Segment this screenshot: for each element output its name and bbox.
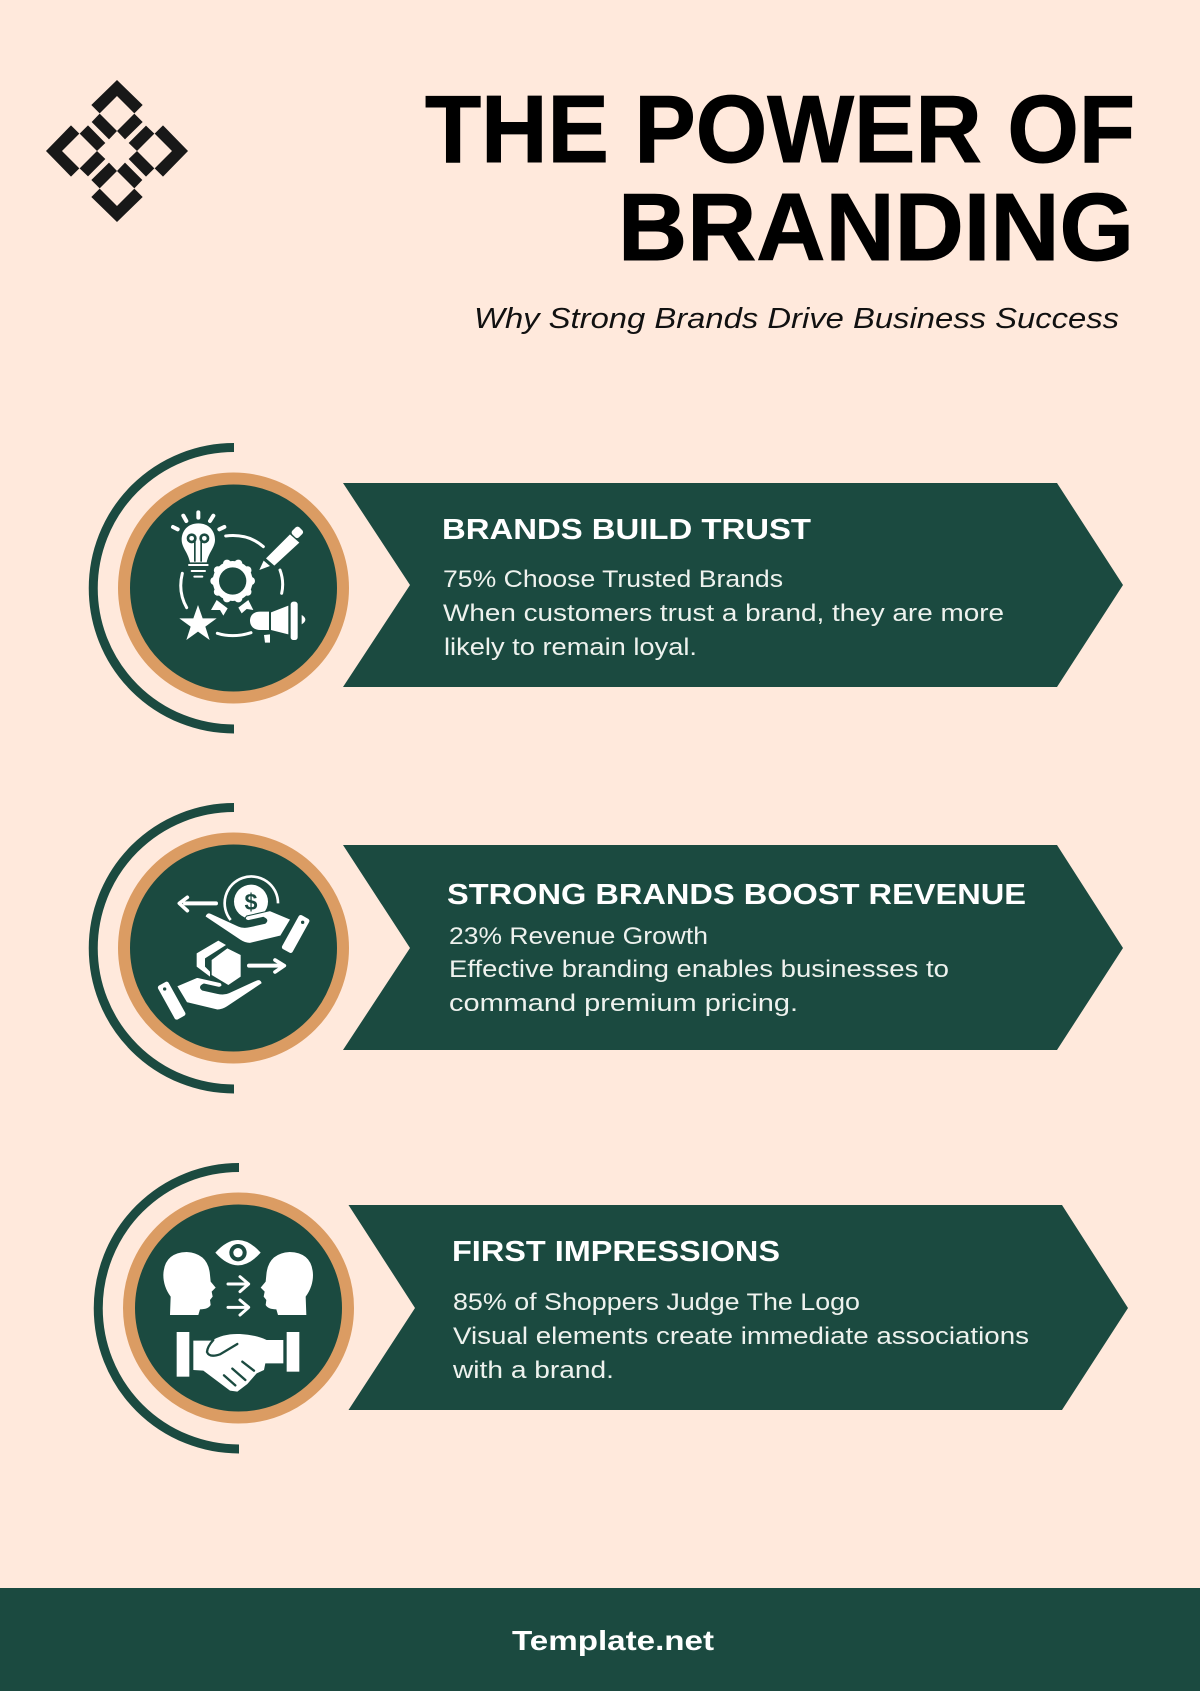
- icon: bulb, award, pencil, star, megaphone: [173, 512, 305, 643]
- icon: heads, eye, arrows: [163, 1240, 313, 1315]
- body text: [449, 923, 949, 1017]
- icon: hands exchanging coin and box: $: [245, 889, 258, 915]
- icon circle: [129, 1198, 348, 1418]
- icon: handshake: [177, 1332, 299, 1392]
- body text: command premium pricing.: [449, 990, 798, 1017]
- body text: with a brand.: [452, 1357, 614, 1384]
- icon circle: [124, 478, 343, 698]
- outer arc: [93, 808, 234, 1089]
- title: [425, 76, 1135, 281]
- body text: [452, 1289, 1029, 1384]
- body text: Visual elements create immediate associations: [453, 1323, 1029, 1350]
- footer: [0, 1588, 1200, 1691]
- outer arc: [98, 1168, 239, 1449]
- footer text: Template.net: [512, 1625, 714, 1656]
- body text: 23% Revenue Growth: [449, 923, 708, 950]
- title: BRANDING: [618, 174, 1134, 281]
- body text: When customers trust a brand, they are more: [443, 600, 1004, 627]
- body text: Effective branding enables businesses to: [449, 956, 949, 983]
- title: THE POWER OF: [425, 76, 1135, 183]
- body text: likely to remain loyal.: [444, 634, 697, 661]
- panel: first impressions: [98, 1168, 1128, 1449]
- heading: BRANDS BUILD TRUST: [442, 514, 811, 546]
- icon circle: [124, 838, 343, 1058]
- chevron banner: [348, 1205, 1128, 1410]
- body text: [443, 566, 1004, 661]
- panel: brands build trust: [93, 448, 1123, 729]
- panel: strong brands boost revenue: [93, 808, 1123, 1089]
- heading: STRONG BRANDS BOOST REVENUE: [447, 879, 1026, 911]
- outer arc: [93, 448, 234, 729]
- heading: FIRST IMPRESSIONS: [452, 1236, 780, 1268]
- subtitle: Why Strong Brands Drive Business Success: [474, 303, 1119, 335]
- chevron banner: [343, 483, 1123, 687]
- chevron banner: [343, 845, 1123, 1050]
- body text: 85% of Shoppers Judge The Logo: [453, 1289, 860, 1316]
- logo: [46, 80, 188, 222]
- body text: 75% Choose Trusted Brands: [443, 566, 783, 593]
- icon: hands exchanging coin and box: [157, 876, 310, 1020]
